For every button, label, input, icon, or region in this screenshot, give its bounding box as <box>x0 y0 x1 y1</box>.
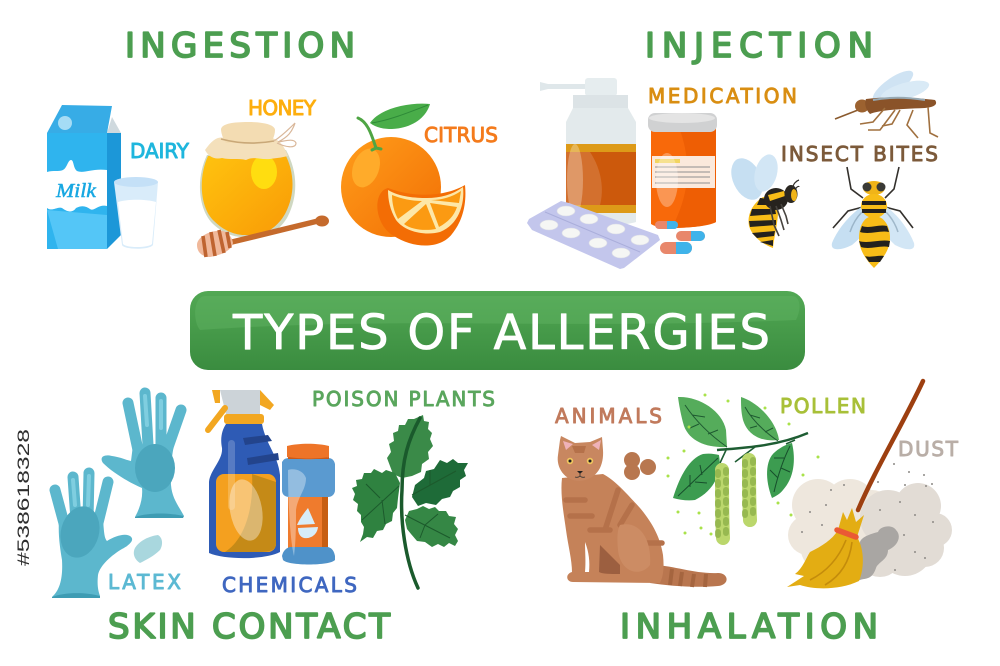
icon: cleaning powder can <box>282 444 335 564</box>
orange slice <box>377 185 465 246</box>
label: chemicals: CHEMICALS <box>222 573 357 597</box>
title banner: TYPES OF ALLERGIES <box>232 305 770 361</box>
cat head <box>558 436 603 481</box>
label: medication: MEDICATION <box>648 84 797 108</box>
label: citrus: CITRUS <box>424 123 498 147</box>
icon: capsules <box>655 221 705 254</box>
icon: mosquito <box>835 66 938 138</box>
label: poison plants: POISON PLANTS <box>312 387 495 411</box>
label: latex: LATEX <box>108 570 181 594</box>
icon: milk carton <box>47 105 158 249</box>
icon: cat <box>558 436 727 587</box>
leaf 1 <box>678 397 727 447</box>
milk splash label: Milk <box>55 180 97 202</box>
pollen dots <box>666 394 820 536</box>
label: insect bites: INSECT BITES <box>781 142 938 166</box>
icon: orange with slice <box>341 104 465 246</box>
label: animals: ANIMALS <box>555 404 662 428</box>
leaf 3 <box>673 454 720 500</box>
leaf 2 <box>741 397 779 441</box>
icon: honey jar <box>197 122 329 257</box>
heading: inhalation: INHALATION <box>620 607 878 647</box>
milk splash label <box>47 160 107 211</box>
icon: lower latex glove <box>52 473 132 598</box>
heading: skin contact: SKIN CONTACT <box>108 607 390 647</box>
icon: poison plant <box>352 415 468 588</box>
icon: spray bottle <box>540 78 636 226</box>
stock image id: #538618328 <box>14 429 33 566</box>
label: pollen: POLLEN <box>780 394 866 418</box>
label: dairy: DAIRY <box>130 139 190 163</box>
icon: fur balls <box>624 452 656 480</box>
prescription label <box>652 156 715 188</box>
icon: blister pack <box>527 201 660 269</box>
icon: top-view wasp <box>832 167 914 268</box>
icon: side-view wasp <box>725 152 799 248</box>
icon: dust cloud <box>788 463 952 580</box>
icon: broom <box>787 381 923 588</box>
heading: injection: INJECTION <box>645 26 873 66</box>
icon: upper latex glove <box>102 393 184 518</box>
icon: cleaning spray bottle <box>208 390 280 558</box>
icon: pill bottle <box>648 113 717 228</box>
leaf 4 <box>767 443 794 498</box>
label: dust: DUST <box>898 437 959 461</box>
heading: ingestion: INGESTION <box>125 26 355 66</box>
title banner <box>190 291 805 370</box>
catkins <box>718 460 753 538</box>
icon: pollen branch <box>666 394 820 538</box>
honey dipper <box>197 216 329 257</box>
glass of milk <box>114 177 158 249</box>
icon: latex scrap <box>134 535 162 563</box>
label: honey: HONEY <box>248 96 317 120</box>
